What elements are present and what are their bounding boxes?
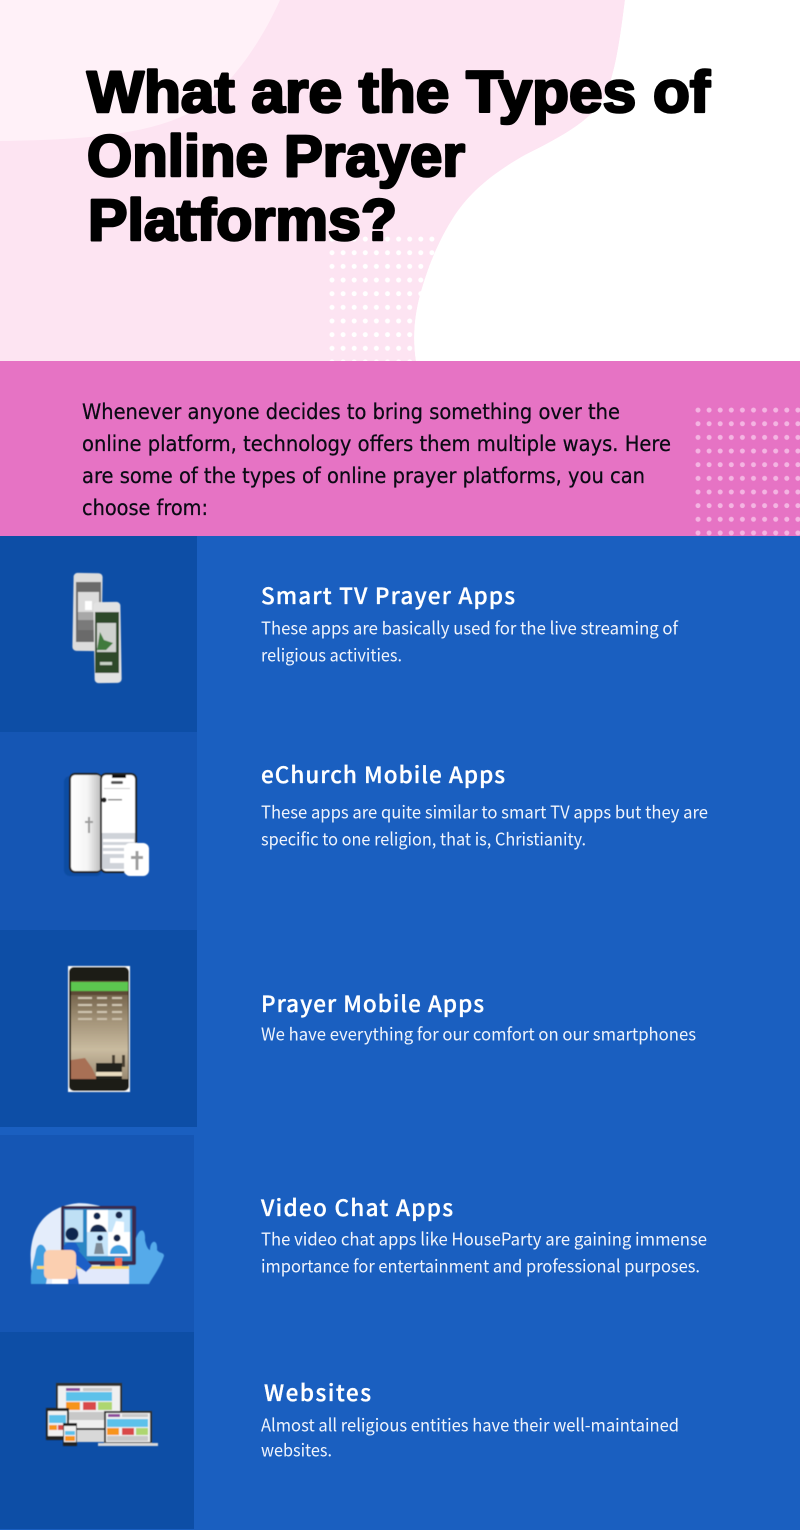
dot pattern: hero [329,236,435,361]
description [261,616,679,668]
item: Websites [46,1376,679,1462]
icon: two smartphones [72,573,122,683]
intro text: choose from: [82,496,208,520]
description: specific to one religion, that is, Christianity. [261,826,586,852]
item: eChurch Mobile Apps [64,758,708,876]
heading: Websites [264,1376,371,1408]
description: These apps are basically used for the live streaming of [261,616,679,640]
heading: Prayer Mobile Apps [261,987,484,1019]
description [261,1226,707,1278]
item: Video Chat Apps [31,1191,707,1284]
description: These apps are quite similar to smart TV apps but they are [261,800,708,824]
dot pattern: intro band [695,407,800,536]
heading: Video Chat Apps [260,1191,453,1223]
panel: list background [0,536,800,1530]
icon: phone with prayer times [68,966,130,1092]
title [87,60,711,253]
item: Prayer Mobile Apps [68,966,696,1092]
heading: eChurch Mobile Apps [261,758,505,790]
intro text [82,400,671,520]
description: We have everything for our comfort on our smartphones [261,1022,696,1046]
description: Almost all religious entities have their well-maintained [261,1412,679,1438]
intro text: are some of the types of online prayer platforms, you can [82,464,645,488]
icon: responsive devices [46,1383,158,1446]
description: websites. [261,1438,332,1462]
description: importance for entertainment and professional purposes. [261,1254,700,1278]
intro text: Whenever anyone decides to bring something over the [82,400,620,424]
title: What are the Types of [87,60,711,125]
description: religious activities. [261,642,402,668]
heading: Smart TV Prayer Apps [261,579,515,611]
intro text: online platform, technology offers them multiple ways. Here [82,432,671,456]
description [261,1412,679,1462]
icon: video call illustration [31,1203,164,1284]
description [261,800,708,852]
item: Smart TV Prayer Apps [72,573,679,683]
icon: phones with cross [64,773,149,876]
light corner blob [0,0,280,141]
panel: hero background [0,0,800,361]
title: Online Prayer [87,124,465,189]
title: Platforms? [88,188,397,253]
panel: intro band [0,361,800,536]
description: The video chat apps like HouseParty are gaining immense [261,1226,707,1252]
pink blob [0,0,625,361]
white blob overlay [414,0,800,361]
